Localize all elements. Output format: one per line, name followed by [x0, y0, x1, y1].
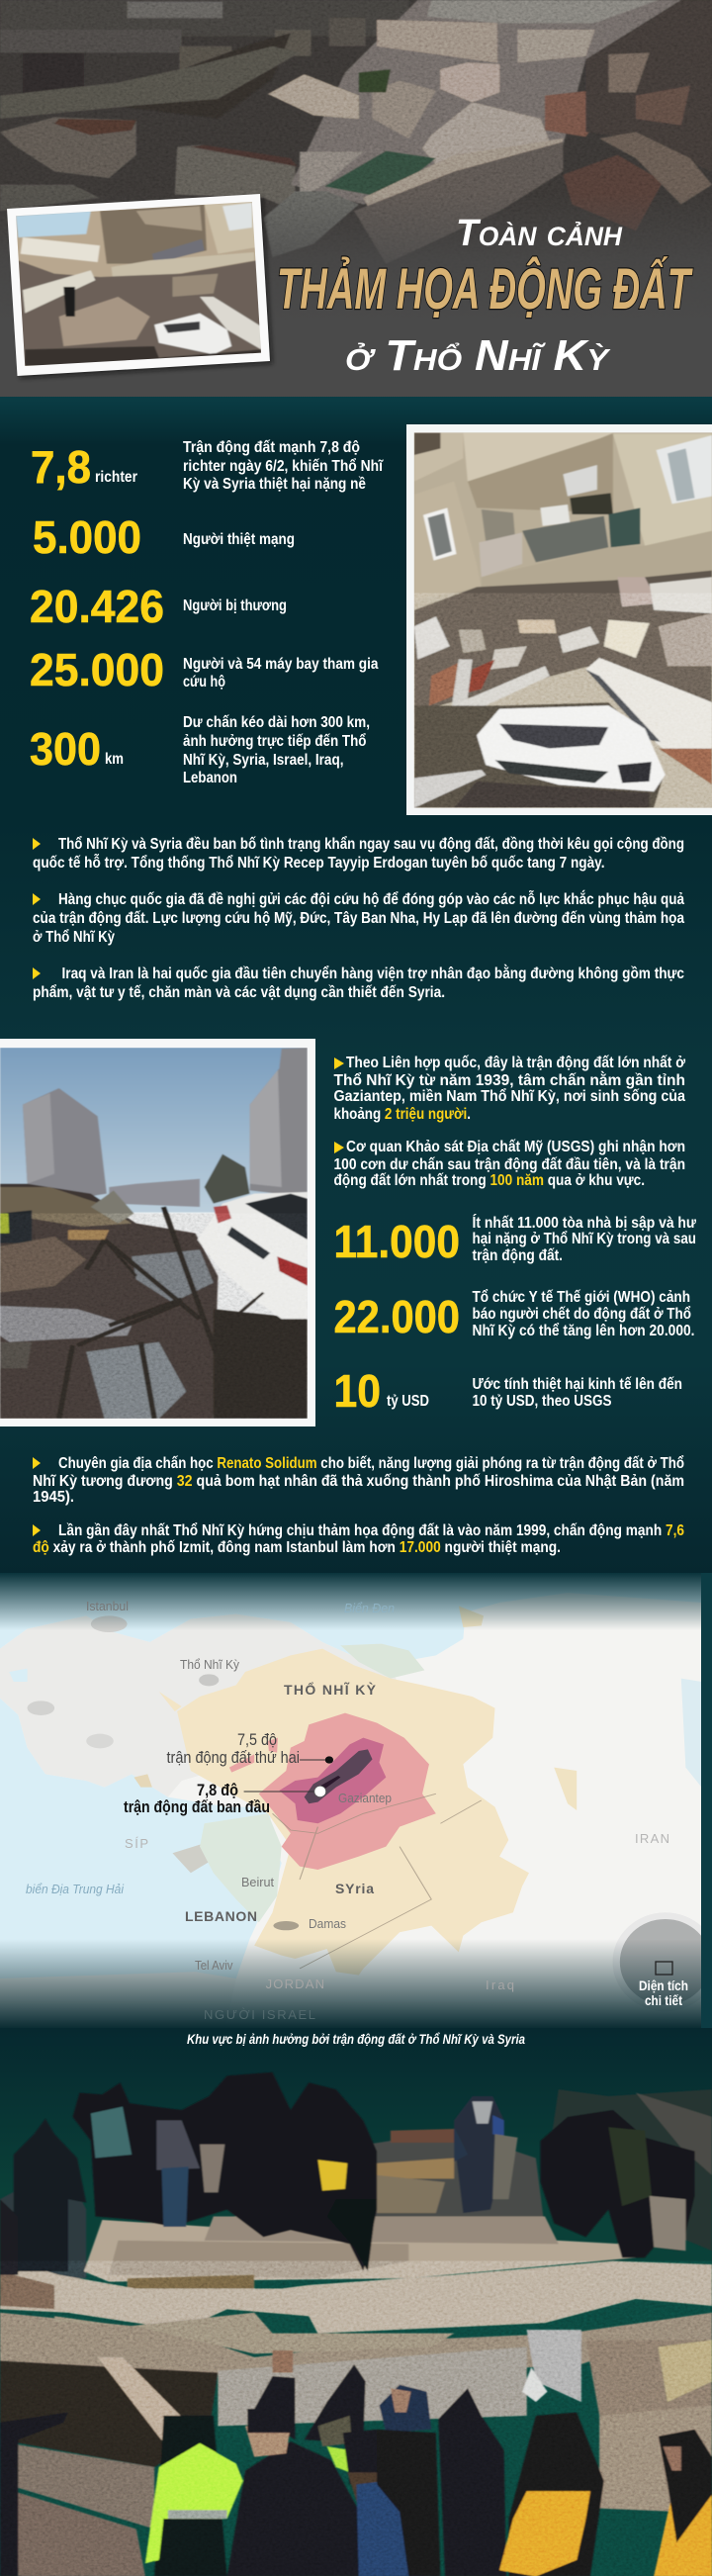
- map labels: JORDAN: [266, 1977, 324, 1991]
- stat: 25.000: Người và 54 máy bay tham gia: [183, 656, 379, 673]
- map labels: trận động đất thứ hai: [166, 1748, 300, 1767]
- panel: key figures: [30, 439, 385, 786]
- bullet: Renato Solidum energy comparison: [33, 1455, 684, 1506]
- map geography and shake zones: [0, 1573, 712, 2058]
- stat: 5.000: [33, 511, 295, 563]
- map labels: Thổ Nhĩ Kỳ: [180, 1657, 239, 1672]
- photo: wrecked car and apartment towers at dusk: [0, 1039, 315, 1426]
- map labels: THỔ NHĨ KỲ: [284, 1681, 377, 1698]
- stat: 10 billion USD: 10: [334, 1365, 381, 1417]
- stat: 7,8 richter: 7,8: [31, 441, 91, 493]
- map labels: [26, 1599, 669, 2022]
- bullet: humanitarian aid: [33, 965, 684, 1001]
- note: largest since 1939: Gaziantep, miền Nam Thổ Nhĩ Kỳ, nơi sinh sống của: [334, 1088, 685, 1105]
- panel: UN and USGS notes with figures: [334, 1055, 697, 1417]
- note: largest since 1939: [334, 1055, 686, 1123]
- bullet: international rescue teams: ở Thổ Nhĩ Kỳ: [33, 929, 115, 946]
- stat: 11.000 buildings: trận động đất.: [473, 1247, 563, 1264]
- map labels: Istanbul: [86, 1599, 129, 1613]
- map labels: Damas: [309, 1916, 346, 1931]
- map labels: biển Địa Trung Hải: [26, 1882, 125, 1896]
- map labels: SÍP: [125, 1836, 148, 1851]
- map labels: Gaziantep: [338, 1791, 392, 1805]
- aerial city photo: [0, 0, 712, 397]
- map labels: LEBANON: [185, 1908, 258, 1924]
- panel: context notes: [33, 1455, 684, 1556]
- stat: 22.000 deaths warning: [334, 1289, 694, 1342]
- title line: Toàn cảnh: Toàn cảnh: [456, 213, 622, 254]
- stat: 25.000: [30, 644, 379, 695]
- stat: 300 km: Dư chấn kéo dài hơn 300 km,: [183, 714, 370, 731]
- page background: [0, 397, 712, 1604]
- stat: 20.426: 20.426: [30, 581, 164, 632]
- map labels: SYria: [335, 1881, 375, 1896]
- title line: ở Thổ Nhĩ Kỳ: ở Thổ Nhĩ Kỳ: [345, 331, 612, 380]
- stat: 11.000 buildings: 11.000: [334, 1216, 460, 1267]
- map labels: trận động đất ban đầu: [124, 1797, 270, 1816]
- stat: 300 km: km: [105, 751, 124, 768]
- stat: 300 km: 300: [30, 723, 101, 775]
- map labels: Biển Đen: [344, 1601, 395, 1615]
- stat: 11.000 buildings: [334, 1215, 697, 1267]
- note: USGS aftershocks: [334, 1139, 685, 1189]
- note: USGS aftershocks: động đất lớn nhất trong 100 năm qua ở khu vực.: [334, 1172, 645, 1189]
- map: affected area: [0, 1573, 712, 2058]
- inset: detail area globe label: chi tiết: [645, 1992, 682, 2008]
- stat: 7,8 richter: Trận động đất mạnh 7,8 độ: [183, 439, 360, 456]
- note: largest since 1939: khoảng 2 triệu người.: [334, 1106, 471, 1123]
- title backdrop gradient: [0, 193, 712, 326]
- stat: 7,8 richter: [31, 439, 385, 493]
- stat: 300 km: Lebanon: [183, 770, 237, 786]
- map labels: Iraq: [486, 1978, 514, 1992]
- note: largest since 1939: Thổ Nhĩ Kỳ từ năm 1939, tâm chấn nằm gần tỉnh: [334, 1071, 685, 1089]
- stat: 20.426: Người bị thương: [183, 598, 287, 614]
- stat: 10 billion USD: 10 tỷ USD, theo USGS: [473, 1393, 611, 1410]
- stat: 7,8 richter: richter: [95, 469, 137, 486]
- bullet: Renato Solidum energy comparison: 1945).: [33, 1489, 74, 1506]
- stat: 5.000: 5.000: [33, 511, 141, 563]
- panel: bullet notes on response: [33, 836, 684, 1001]
- map labels: Beirut: [241, 1875, 274, 1889]
- bullet: state of emergency: [33, 836, 684, 872]
- stat: 10 billion USD: [334, 1365, 682, 1417]
- photo: collapsed building and white car: [406, 424, 712, 815]
- stat: 10 billion USD: Ước tính thiệt hại kinh tế lên đến: [473, 1376, 682, 1393]
- polaroid photo: [0, 194, 282, 379]
- stat: 25.000: cứu hộ: [183, 674, 225, 690]
- bullet: international rescue teams: [33, 890, 684, 946]
- bullet: 1999 Izmit earthquake: độ xảy ra ở thành phố Izmit, đông nam Istanbul làm hơn 17.000 người thiệt mạng.: [33, 1539, 561, 1556]
- fade overlays at top and bottom of map: [0, 1573, 712, 1630]
- stat: 5.000: Người thiệt mạng: [183, 531, 295, 548]
- stat: 7,8 richter: richter ngày 6/2, khiến Thổ Nhĩ: [183, 458, 385, 475]
- stat: 300 km: Nhĩ Kỳ, Syria, Israel, Iraq,: [183, 752, 344, 769]
- inset: detail area globe label: Diện tích: [639, 1978, 688, 1993]
- inset: detail area globe label: [639, 1962, 688, 2008]
- bullet: 1999 Izmit earthquake: [33, 1522, 684, 1556]
- bullet: humanitarian aid: phẩm, vật tư y tế, chăn màn và các vật dụng cần thiết đến Syria.: [33, 984, 445, 1001]
- bullet: Renato Solidum energy comparison: Nhĩ Kỳ tương đương 32 quả bom hạt nhân đã thả xuống thành phố Hiroshima của Nhật Bản (năm: [33, 1473, 684, 1490]
- bottom section background: [0, 2028, 712, 2576]
- map labels: Tel Aviv: [195, 1958, 233, 1973]
- map labels: NGƯỜI ISRAEL: [204, 2007, 315, 2022]
- stat: 10 billion USD: tỷ USD: [387, 1393, 429, 1410]
- map labels: 7,8 độ: [197, 1781, 238, 1799]
- photo: rescuers on collapsed building: [0, 2072, 712, 2576]
- stat: 25.000: 25.000: [30, 644, 164, 695]
- header panel: aerial photo with title: [0, 0, 712, 397]
- stat: 300 km: [30, 714, 370, 786]
- stat: 7,8 richter: Kỳ và Syria thiệt hại nặng nề: [183, 476, 366, 493]
- map caption: Khu vực bị ảnh hưởng bởi trận động đất ở Thổ Nhĩ Kỳ và Syria: [187, 2031, 525, 2047]
- stat: 22.000 deaths warning: 22.000: [334, 1291, 460, 1342]
- bullet: state of emergency: quốc tế hỗ trợ. Tổng thống Thổ Nhĩ Kỳ Recep Tayyip Erdogan tuyên bố quốc tang 7 ngày.: [33, 855, 605, 872]
- map labels: IRAN: [635, 1831, 669, 1846]
- stat: 20.426: [30, 581, 287, 632]
- map labels: 7,5 độ: [237, 1730, 277, 1749]
- stat: 300 km: ảnh hưởng trực tiếp đến Thổ: [183, 733, 366, 750]
